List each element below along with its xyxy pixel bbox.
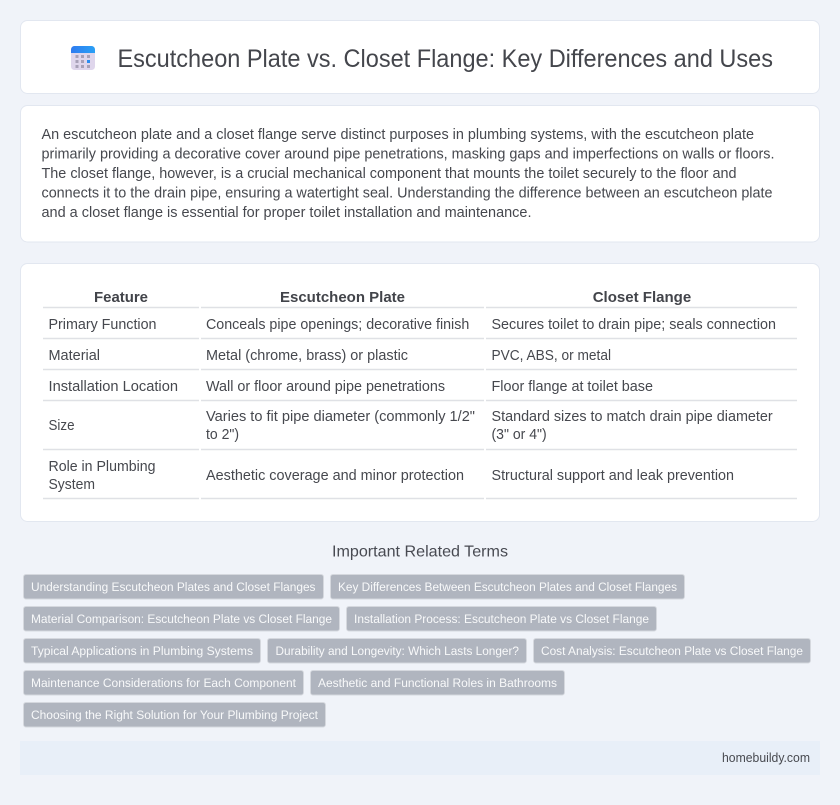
row: installation location: Installation Location [48, 379, 178, 395]
chip [24, 574, 324, 599]
row: installation location [48, 379, 653, 395]
table header row: Closet Flange [593, 289, 691, 306]
chip: Understanding Escutcheon Plates and Closet Flanges [31, 580, 316, 594]
chip [24, 606, 340, 631]
panel: related term chips [24, 574, 810, 727]
chip [534, 638, 810, 663]
chip [310, 670, 564, 695]
text block: introduction paragraph [42, 127, 774, 221]
chip: Cost Analysis: Escutcheon Plate vs Closet Flange [541, 644, 803, 658]
row: primary function: Conceals pipe openings; decorative finish [206, 317, 469, 333]
text block: introduction paragraph: primarily providing a decorative cover around pipe penetrations, masking gaps and imperfections on walls or floors. [42, 146, 774, 162]
row: primary function: Primary Function [48, 317, 156, 333]
table header row: Feature [94, 289, 148, 306]
chip: Aesthetic and Functional Roles in Bathrooms [318, 676, 557, 690]
footer source text: homebuildy.com [722, 751, 810, 765]
chip [330, 574, 684, 599]
title: Escutcheon Plate vs. Closet Flange: Key Differences and Uses [118, 45, 773, 73]
chip: Material Comparison: Escutcheon Plate vs Closet Flange [31, 612, 332, 626]
text block: introduction paragraph: connects it to the drain pipe, ensuring a watertight seal. Understanding the difference between an escutcheon plate [42, 186, 772, 202]
text block: introduction paragraph: and a closet flange is essential for proper toilet installation and maintenance. [42, 205, 532, 221]
table header row [94, 289, 691, 306]
row: size: (3" or 4") [492, 427, 547, 443]
row: primary function [48, 317, 776, 333]
panel: introduction [20, 106, 820, 242]
footer bar [20, 741, 820, 775]
table header row: Escutcheon Plate [280, 289, 405, 306]
chip: Key Differences Between Escutcheon Plates and Closet Flanges [338, 580, 677, 594]
row: role in plumbing system [48, 459, 734, 493]
row: role in plumbing system: Aesthetic coverage and minor protection [206, 468, 464, 484]
row: primary function: Secures toilet to drain pipe; seals connection [492, 317, 776, 333]
chip: Choosing the Right Solution for Your Plumbing Project [31, 708, 319, 722]
text block: introduction paragraph: The closet flange, however, is a crucial mechanical component that mounts the toilet securely to the floor and [42, 166, 736, 182]
chip [24, 702, 326, 727]
row: size: to 2") [206, 427, 239, 443]
chip [24, 638, 260, 663]
row: role in plumbing system: System [48, 477, 95, 493]
row: material: Material [48, 348, 100, 364]
row: size: Size [48, 418, 74, 434]
row: role in plumbing system: Structural support and leak prevention [492, 468, 734, 484]
chip: Typical Applications in Plumbing Systems [31, 644, 253, 658]
chip: Installation Process: Escutcheon Plate vs Closet Flange [354, 612, 649, 626]
row: installation location: Floor flange at toilet base [492, 379, 653, 395]
heading: important related terms: Important Related Terms [332, 544, 508, 560]
row: material: Metal (chrome, brass) or plastic [206, 348, 408, 364]
row: installation location: Wall or floor around pipe penetrations [206, 379, 445, 395]
chip [24, 670, 304, 695]
panel: title header [20, 20, 820, 94]
row: material [48, 348, 611, 364]
chip [346, 606, 656, 631]
row: size: Standard sizes to match drain pipe diameter [492, 409, 773, 425]
icon: calendar grid [71, 46, 95, 70]
row: material: PVC, ABS, or metal [492, 348, 611, 364]
text block: introduction paragraph: An escutcheon plate and a closet flange serve distinct purposes in plumbing systems, with the escutcheon plate [42, 127, 754, 143]
chip: Durability and Longevity: Which Lasts Longer? [276, 644, 519, 658]
table grid lines [43, 308, 797, 498]
row: role in plumbing system: Role in Plumbing [48, 459, 156, 475]
row: size [48, 409, 773, 443]
chip: Maintenance Considerations for Each Component [31, 676, 297, 690]
row: size: Varies to fit pipe diameter (commonly 1/2" [206, 409, 475, 425]
panel: comparison table [20, 264, 820, 522]
chip [268, 638, 526, 663]
